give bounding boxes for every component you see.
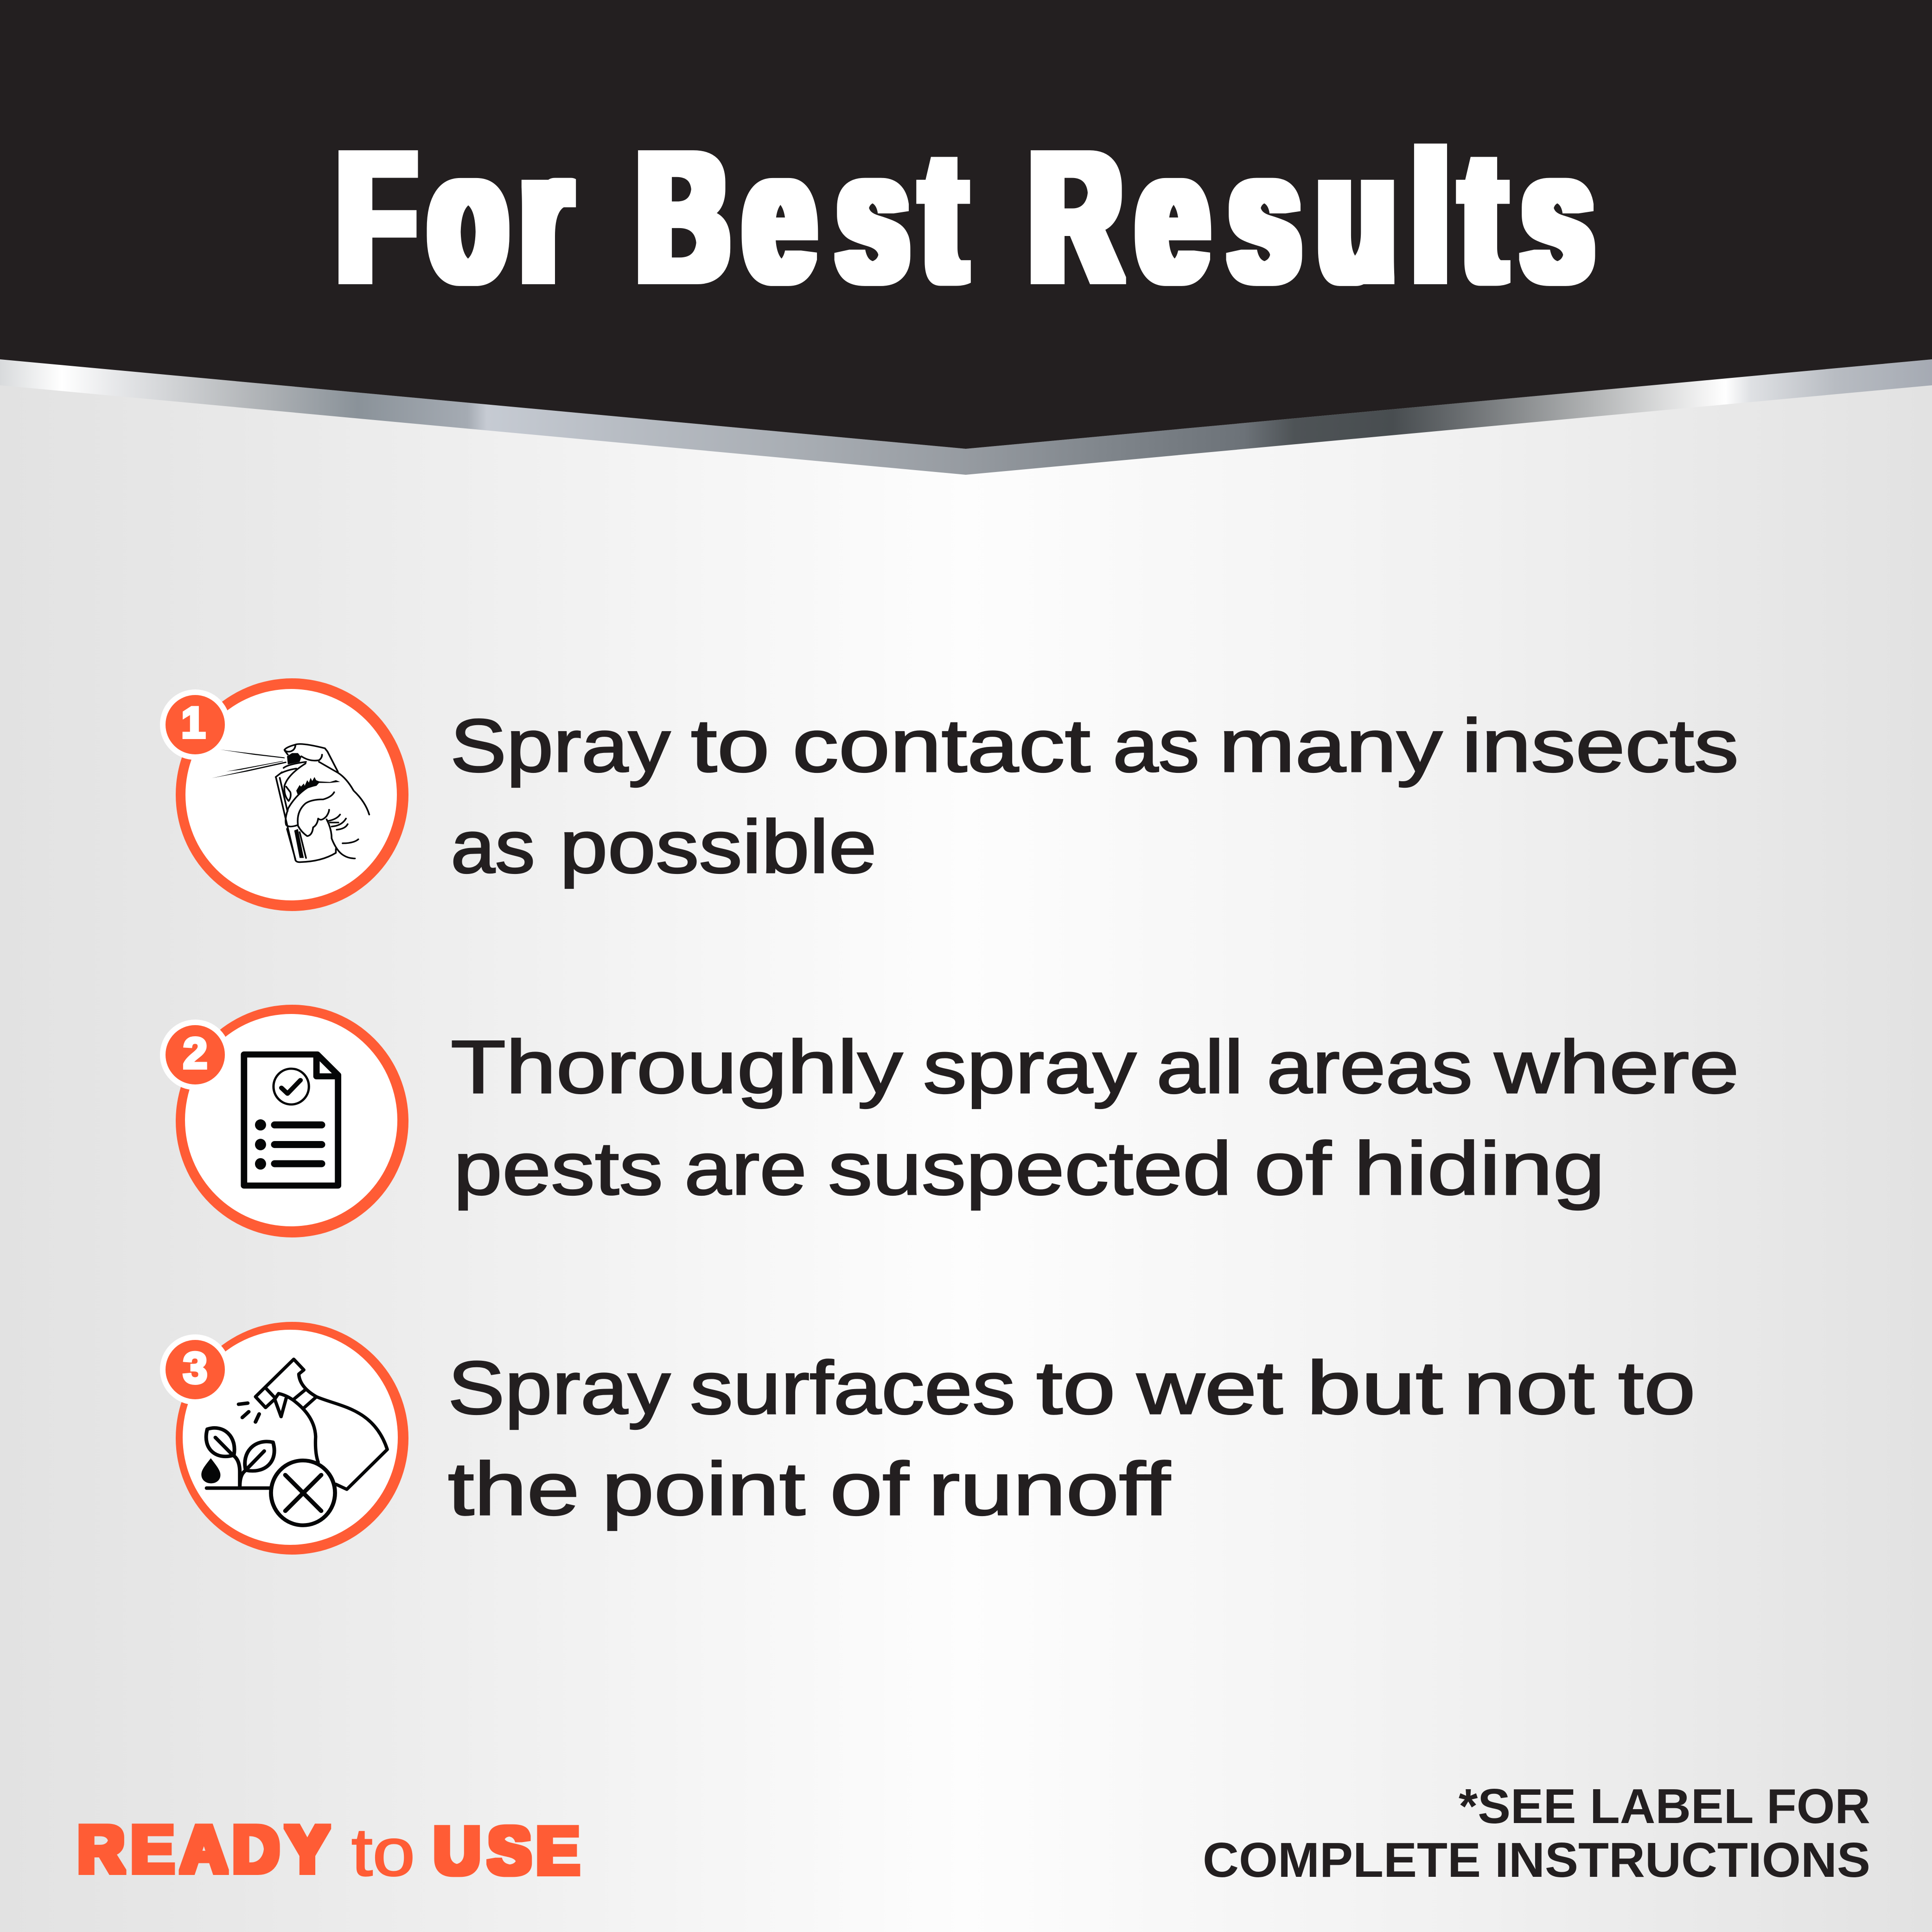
step 3 text: point	[602, 1447, 805, 1531]
footnote	[1203, 1779, 1870, 1887]
step 3 text	[448, 1346, 1696, 1531]
icon: spray bottle, plant and no-runoff mark	[201, 1359, 387, 1525]
step 1 text: as	[1113, 704, 1199, 788]
ready to use label: USE	[434, 1814, 580, 1888]
step 1 text: contact	[792, 704, 1090, 788]
step 2 text: Thoroughly	[451, 1025, 903, 1109]
step 3 text: surfaces	[690, 1346, 1015, 1430]
step 1	[160, 678, 1739, 911]
step 2 number badge: 2	[183, 1029, 207, 1078]
step 2 text: are	[684, 1127, 807, 1211]
ready to use label	[77, 1812, 580, 1890]
step 1 text	[450, 704, 1739, 889]
step 2 text: of	[1254, 1127, 1332, 1211]
step 3 text: but	[1307, 1346, 1443, 1430]
footnote: *SEE LABEL FOR	[1459, 1779, 1870, 1834]
step 2 icon circle	[176, 1005, 408, 1237]
icon: checklist document	[244, 1054, 338, 1186]
step 3 text: of	[830, 1447, 909, 1531]
title: For Best Results	[338, 114, 1593, 320]
step 2 text: hiding	[1354, 1127, 1605, 1211]
step 3 number badge: 3	[183, 1344, 207, 1393]
step 1 number badge	[160, 689, 230, 760]
step 3 text: Spray	[448, 1346, 670, 1430]
step 3 icon circle	[176, 1322, 408, 1555]
step 2 text: spray	[923, 1025, 1136, 1109]
silver chevron band	[0, 359, 1932, 475]
step 1 text: as	[451, 805, 535, 889]
ready to use label: READY	[77, 1812, 329, 1887]
step 1 text: many	[1219, 704, 1442, 788]
step 3 number badge	[160, 1334, 230, 1405]
step 3 text: wet	[1136, 1346, 1283, 1430]
step 2 text: all	[1156, 1025, 1243, 1109]
step 2 text: areas	[1267, 1025, 1473, 1109]
icon: hand holding spray can	[211, 744, 369, 862]
header banner	[0, 0, 1932, 449]
footnote: COMPLETE INSTRUCTIONS	[1203, 1833, 1870, 1887]
step 1 text: to	[691, 704, 770, 788]
step 2 number badge	[160, 1020, 230, 1090]
step 3 text: runoff	[928, 1447, 1171, 1531]
step 3 text: the	[448, 1447, 580, 1531]
step 1 number badge: 1	[181, 698, 205, 747]
step 2 text: where	[1494, 1025, 1739, 1109]
step 2 text: suspected	[828, 1127, 1232, 1211]
step 1 text: Spray	[450, 704, 670, 788]
step 1 icon circle	[176, 678, 408, 911]
step 3 text: to	[1618, 1346, 1696, 1430]
step 2 text	[451, 1025, 1739, 1211]
step 1 text: insects	[1462, 704, 1739, 788]
ready to use label: to	[351, 1814, 415, 1890]
step 3 text: to	[1036, 1346, 1116, 1430]
step 1 text: possible	[560, 805, 877, 889]
step 2	[160, 1005, 1739, 1237]
step 2 text: pests	[453, 1127, 663, 1211]
step 3	[160, 1322, 1696, 1555]
step 3 text: not	[1463, 1346, 1594, 1430]
